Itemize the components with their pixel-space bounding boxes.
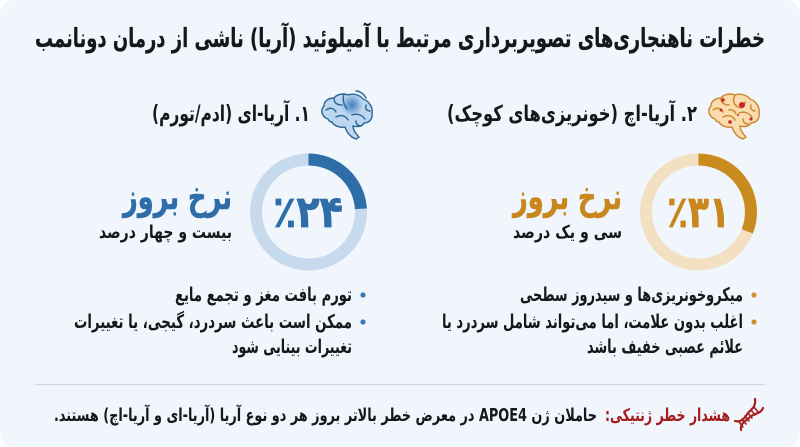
label: incidence rate: نرخ بروز [512, 177, 622, 218]
bullet list: ARIA-E: ممکن است باعث سردرد، گیجی، یا تغییرات [74, 310, 352, 333]
heading: ARIA-E: ۱. آریا-ای (ادم/تورم) [152, 99, 310, 127]
warning text: حاملان ژن APOE4 در معرض خطر بالاتر بروز هر دو نوع آریا (آریا-ای و آریا-اچ) هستند. [54, 403, 597, 426]
panel: ARIA-H [442, 94, 759, 358]
bullet list: ARIA-E [74, 284, 366, 358]
label: incidence rate: نرخ بروز [122, 177, 232, 218]
donut chart: 24 percent [256, 160, 361, 264]
icon: DNA helix [735, 399, 763, 430]
icon: brain with edema [322, 91, 372, 139]
donut chart: 31 percent [646, 160, 751, 264]
label: thirty one percent: سی و یک درصد [513, 222, 622, 243]
callout: genetic risk warning [54, 399, 763, 430]
value: 24 percent: ٪۲۴ [273, 187, 343, 238]
bullet list: ARIA-E: تورم بافت مغز و تجمع مایع [175, 284, 352, 306]
heading: ARIA-H: ۲. آریا-اچ (خونریزی‌های کوچک) [447, 99, 697, 127]
bullet list: ARIA-E: تغییرات بینایی شود [232, 336, 352, 358]
bullet list: ARIA-H [442, 284, 757, 358]
label: twenty four percent: بیست و چهار درصد [99, 222, 232, 243]
warning label: هشدار خطر ژنتیکی: [605, 406, 730, 426]
icon: brain with microbleeds [709, 94, 759, 139]
panel: ARIA-E [74, 91, 372, 358]
value: 31 percent: ٪۳۱ [667, 187, 730, 238]
